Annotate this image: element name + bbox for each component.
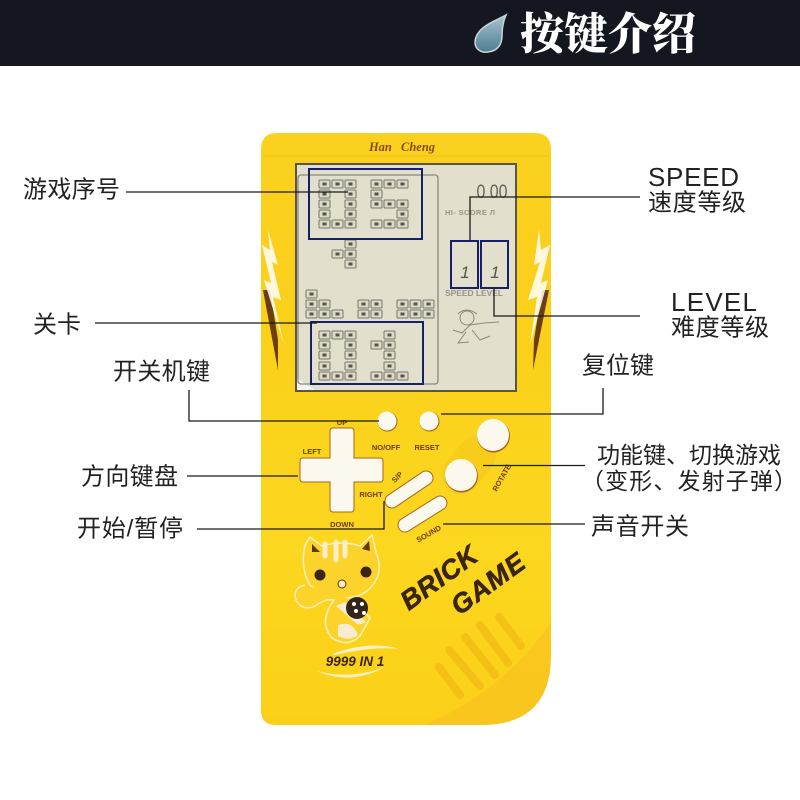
rotate button groove [461,455,477,475]
label: start pause [77,501,384,542]
leader line [197,501,384,529]
level digit: 1 [490,263,500,282]
title: 按键介绍 [520,10,696,59]
leader line [494,288,640,316]
leader line [126,191,348,193]
9999 in 1 logo: 9999 IN 1 [326,654,384,669]
blue highlight boxes [309,169,508,384]
button labels: DOWN [330,520,354,529]
speed level label: SPEED LEVEL [445,288,503,298]
LCD screen [295,163,517,392]
leader line [189,390,379,421]
label: sound switch: 声音开关 [591,514,689,540]
leader line [470,197,640,241]
label: game number: 游戏序号 [23,176,120,204]
label: speed [470,162,746,241]
label: function key: 功能键、切换游戏 [597,442,781,468]
button: on/off [378,412,398,432]
header bar [0,0,800,66]
button labels: S/P [390,470,405,485]
button labels: RESET [414,443,440,452]
label: power key: 开关机键 [113,358,210,386]
9999 in 1 logo [317,645,399,678]
handheld console body [261,133,551,725]
label: speed: SPEED [648,162,739,192]
label: start pause: 开始/暂停 [77,516,183,542]
button labels [303,418,513,545]
button labels: NO/OFF [372,443,401,452]
button: start pause [392,478,426,501]
button: sound [405,503,440,525]
brand: BRICK: BRICK [395,539,485,616]
icon: water drop [475,15,506,52]
label: function key [483,442,797,494]
label: level: 难度等级 [671,314,769,342]
leader line [483,464,585,466]
game block digits 05 [319,180,408,228]
button labels: LEFT [303,447,322,456]
speed digit: 1 [460,263,470,282]
left lightning decoration [262,230,284,370]
label: speed: 速度等级 [648,190,746,216]
leader line [443,523,585,525]
d-pad [300,428,383,512]
button: function lower [445,459,478,492]
game block digits 01 [319,331,408,380]
cat mascot [295,535,379,643]
label: stage: 关卡 [33,312,81,338]
button: reset [420,412,440,432]
button labels: ROTATE [491,463,513,493]
running character [453,310,499,343]
label: function key: （变形、发射子弹） [581,468,797,494]
stacked blocks [306,290,434,318]
leader line [441,388,603,414]
speaker grille [439,617,521,695]
leader line [187,475,298,477]
label: power key [113,358,379,421]
label: reset key: 复位键 [582,352,654,380]
brand: Han Cheng: Han Cheng [368,140,435,154]
label: level [494,287,769,342]
label: level: LEVEL [671,287,757,317]
button: function upper [477,419,510,452]
label: reset key [441,352,654,414]
button labels: SOUND [415,523,443,545]
hi-score label: HI- SCORE Л [445,208,495,217]
falling tetromino [332,240,356,268]
button labels: UP [337,418,347,427]
leader line [95,322,317,324]
brand: GAME: GAME [445,547,532,621]
right lightning decoration [528,230,550,370]
button labels: RIGHT [359,490,383,499]
label: direction pad: 方向键盘 [81,464,178,490]
score digits: 0 00 [476,182,508,203]
